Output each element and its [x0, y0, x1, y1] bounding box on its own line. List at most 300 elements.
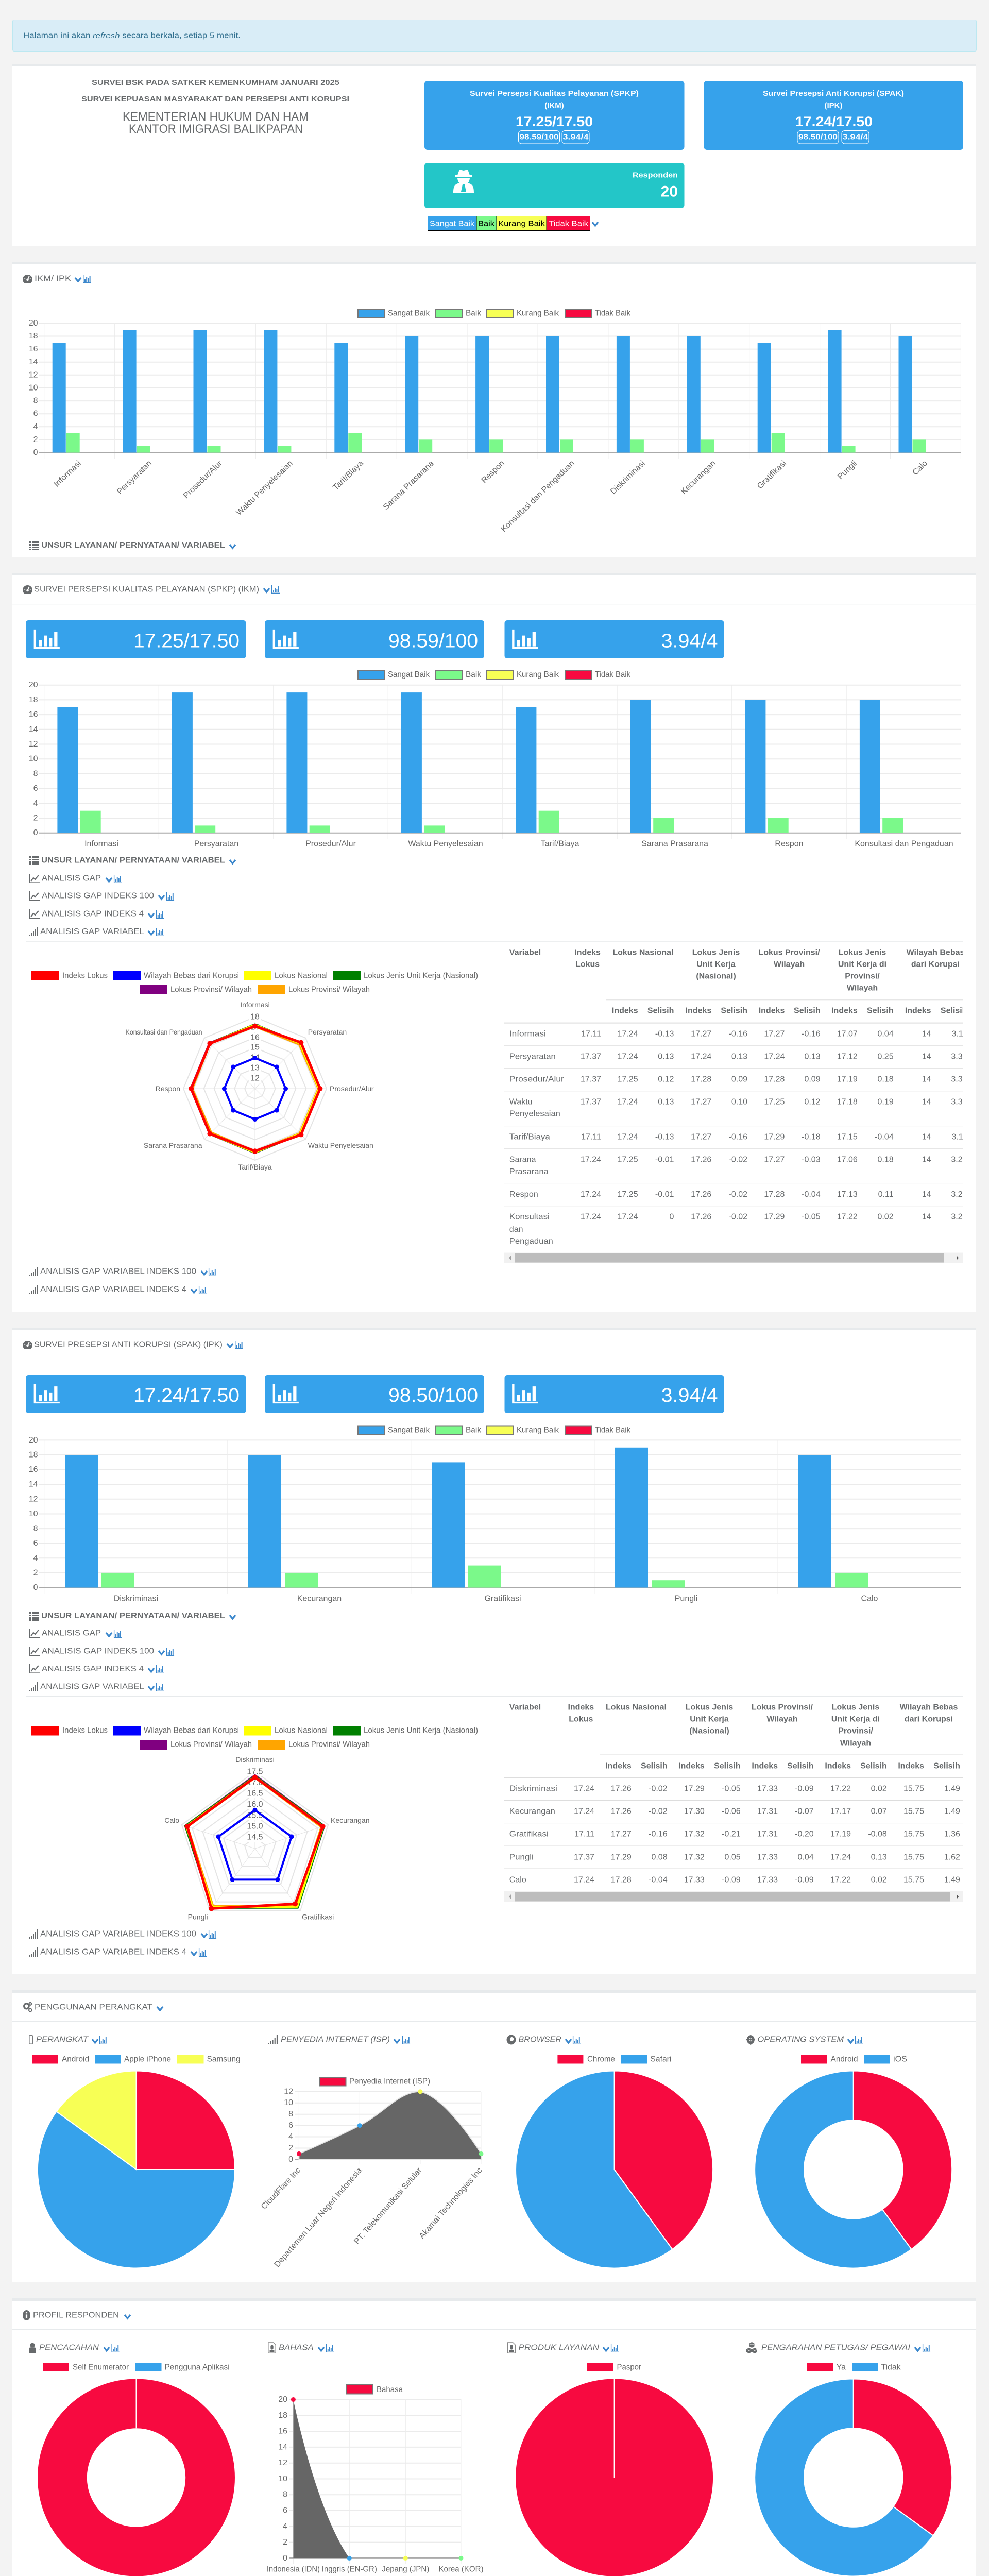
row: Konsultasi dan Pengaduan: 14: [922, 1213, 931, 1221]
bar chart: SPKP elements: Konsultasi dan Pengaduan: [855, 840, 953, 848]
bar chart: all elements: 18: [29, 332, 38, 341]
radar chart: SPKP: 14: [250, 1053, 260, 1062]
heading: analisis gap: [29, 1629, 122, 1638]
row: Persyaratan: 17.37: [581, 1052, 601, 1061]
row: Tarif/Biaya: 14: [922, 1132, 931, 1142]
legend: pencacahan: [43, 2363, 230, 2372]
row: Persyaratan: 17.24: [618, 1052, 638, 1061]
table: analisis gap SPAK: Indeks: [568, 1703, 594, 1711]
bar chart: SPAK elements: Calo: [861, 1594, 878, 1603]
bar chart: SPKP elements: Tarif/Biaya: [541, 840, 579, 848]
radar legend: Wilayah Bebas dari Korupsi: [144, 972, 239, 980]
area chart: ISP: CloudFlare Inc: [260, 2166, 302, 2211]
area chart: ISP: 2: [288, 2144, 293, 2153]
table: analisis gap SPAK: Selisih: [860, 1762, 887, 1770]
row: Calo: 17.33: [684, 1875, 705, 1885]
bar chart: SPKP elements: 20: [29, 681, 38, 689]
card: SPAK score: Survei Presepsi Anti Korupsi (SPAK): [763, 89, 904, 98]
table: analisis gap SPKP: Indeks: [612, 1007, 638, 1015]
row: Gratifikasi: 17.11: [574, 1830, 594, 1838]
table: analisis gap SPAK: Unit Kerja di: [831, 1715, 880, 1724]
row: Gratifikasi: 17.32: [684, 1830, 705, 1838]
radar chart: SPKP: Informasi: [240, 1001, 270, 1009]
row: Sarana Prasarana: 0.18: [877, 1155, 894, 1164]
row: Informasi: 17.27: [764, 1029, 785, 1039]
radar chart: SPAK: 16.5: [247, 1789, 263, 1798]
radar chart: SPAK: 14.5: [247, 1833, 263, 1841]
radar legend: Lokus Nasional: [275, 1726, 328, 1735]
row: Respon: 17.24: [581, 1190, 601, 1199]
row: Gratifikasi: [509, 1830, 960, 1838]
row: Pungli: 1.62: [944, 1853, 960, 1862]
card: SPAK score: (IPK): [824, 101, 843, 110]
heading: perangkat: PERANGKAT: [36, 2035, 89, 2044]
row: Prosedur/Alur: 17.25: [618, 1075, 638, 1084]
card: SPKP score: (IKM): [544, 101, 564, 110]
table: analisis gap SPKP: Lokus Jenis: [692, 948, 740, 957]
bar chart: all elements: 6: [33, 410, 38, 418]
stat card: indeks 17.5: 17.25/17.50: [133, 631, 240, 652]
row: Respon: Respon: [509, 1190, 538, 1199]
legend: operating system: iOS: [893, 2055, 907, 2064]
row: Sarana Prasarana: 17.24: [581, 1155, 601, 1164]
area chart: bahasa: Inggris (EN-GR): [322, 2565, 377, 2574]
heading: analisis gap indeks 100: ANALISIS GAP INDEKS 100: [42, 1647, 154, 1656]
table: analisis gap SPAK: Lokus Provinsi/: [752, 1703, 813, 1711]
bar chart: SPKP elements: 8: [33, 769, 38, 778]
legend: perangkat: Samsung: [207, 2055, 241, 2064]
legend: rating scale: Sangat Baik: [430, 219, 475, 228]
heading: IKM/ IPK: [23, 274, 91, 283]
radar chart: SPAK: Diskriminasi: [235, 1755, 275, 1764]
area chart: bahasa: 4: [283, 2522, 287, 2531]
heading: analisis gap indeks 4: [29, 1664, 164, 1673]
heading: operating system: [746, 2035, 863, 2045]
row: Waktu Penyelesaian: 0.10: [731, 1097, 747, 1107]
table: analisis gap SPKP: Unit Kerja: [696, 960, 736, 969]
stat card: indeks 100: [265, 620, 484, 658]
bar chart: SPKP elements: 6: [33, 784, 38, 793]
row: Kecurangan: 17.31: [757, 1807, 778, 1816]
row: Sarana Prasarana: 17.06: [837, 1155, 858, 1164]
chart legend: [358, 309, 631, 317]
bar chart: SPKP elements: 12: [29, 740, 38, 749]
bar chart: SPKP elements: 14: [29, 725, 38, 734]
table: analisis gap SPAK: Provinsi/: [838, 1727, 873, 1735]
panel: survey summary: [12, 64, 976, 246]
row: Persyaratan: 0.13: [658, 1052, 674, 1061]
bar chart: SPAK elements: [29, 1436, 961, 1603]
row: Kecurangan: [509, 1807, 960, 1816]
radar chart: SPKP: 13: [250, 1063, 260, 1073]
legend: browser: Chrome: [587, 2055, 615, 2064]
table: analisis gap SPKP: Selisih: [721, 1007, 747, 1015]
table: analisis gap SPKP: Indeks: [905, 1007, 931, 1015]
table: analisis gap SPKP: Lokus Provinsi/: [758, 948, 820, 957]
chart legend: Kurang Baik: [517, 1426, 559, 1434]
card: SPAK score: 17.24/17.50: [795, 114, 873, 129]
table: analisis gap SPKP: Lokus Nasional: [612, 948, 673, 957]
bar chart: all elements: 16: [29, 345, 38, 353]
row: Konsultasi dan Pengaduan: dan: [509, 1225, 523, 1234]
bar chart: all elements: Kecurangan: [679, 459, 718, 496]
card: SPKP score: 98.59/100: [519, 133, 558, 141]
row: Kecurangan: 17.17: [830, 1807, 851, 1816]
row: Informasi: 0.04: [877, 1029, 894, 1039]
row: Konsultasi dan Pengaduan: -0.05: [802, 1213, 821, 1221]
heading: penggunaan perangkat: PENGGUNAAN PERANGKAT: [35, 2003, 152, 2011]
bar chart: SPAK elements: 12: [29, 1495, 38, 1503]
row: Kecurangan: 17.24: [574, 1807, 594, 1816]
row: Diskriminasi: 17.26: [611, 1785, 632, 1793]
heading: pengarahan petugas: [746, 2342, 930, 2353]
table: analisis gap SPKP: Lokus: [575, 960, 600, 969]
area chart: ISP: 0: [288, 2155, 293, 2164]
row: Pungli: 17.33: [757, 1853, 778, 1862]
heading: analisis gap indeks 4: ANALISIS GAP INDEKS 4: [42, 910, 144, 918]
row: Diskriminasi: 15.75: [903, 1785, 924, 1793]
heading: analisis gap indeks 100: ANALISIS GAP INDEKS 100: [42, 891, 154, 901]
row: Persyaratan: 14: [922, 1052, 931, 1061]
row: Waktu Penyelesaian: 0.19: [877, 1097, 894, 1107]
row: Konsultasi dan Pengaduan: [509, 1213, 967, 1246]
radar chart: SPAK: Gratifikasi: [302, 1913, 334, 1921]
chart legend: Baik: [466, 670, 482, 679]
row: Calo: -0.04: [649, 1875, 668, 1885]
radar legend: Lokus Provinsi/ Wilayah: [288, 1740, 370, 1749]
bar chart: all elements: Diskriminasi: [609, 459, 647, 496]
panel: penggunaan perangkat: [12, 1990, 976, 2282]
heading: gap variabel indeks 4: ANALISIS GAP VARIABEL INDEKS 4: [40, 1947, 186, 1957]
row: Waktu Penyelesaian: 17.18: [837, 1097, 858, 1107]
row: Diskriminasi: -0.02: [649, 1785, 668, 1793]
bar chart: all elements: 4: [33, 422, 38, 431]
heading: gap variabel indeks 100: ANALISIS GAP VARIABEL INDEKS 100: [40, 1930, 196, 1938]
radar legend: Lokus Jenis Unit Kerja (Nasional): [364, 1726, 478, 1735]
heading: penyedia internet: PENYEDIA INTERNET (ISP): [281, 2035, 390, 2044]
row: Informasi: 17.27: [691, 1029, 711, 1039]
row: Waktu Penyelesaian: 3.37: [951, 1097, 967, 1107]
row: Persyaratan: 17.12: [837, 1052, 858, 1061]
chart legend: Sangat Baik: [388, 670, 430, 679]
bar chart: SPAK elements: 6: [33, 1539, 38, 1548]
row: Diskriminasi: 17.24: [574, 1785, 594, 1793]
legend: perangkat: Android: [62, 2055, 89, 2064]
radar legend: Lokus Nasional: [275, 972, 328, 980]
bar chart: SPAK elements: 16: [29, 1465, 38, 1474]
bar chart: all elements: 12: [29, 370, 38, 379]
row: Diskriminasi: 17.22: [830, 1785, 851, 1793]
table: analisis gap SPKP: Unit Kerja di: [838, 960, 886, 969]
row: Respon: 0.11: [878, 1190, 894, 1199]
table: analisis gap SPKP: Wilayah Bebas: [907, 948, 964, 957]
table: analisis gap SPKP: (Nasional): [696, 972, 736, 981]
chart legend: Tidak Baik: [595, 309, 631, 317]
row: Calo: 0.02: [871, 1875, 887, 1885]
pie chart: perangkat: [38, 2071, 235, 2268]
scrollbar: [504, 1253, 963, 1263]
table: analisis gap SPAK: Lokus: [569, 1715, 593, 1724]
row: Waktu Penyelesaian: 17.24: [618, 1097, 638, 1107]
radar chart: SPKP: Respon: [156, 1084, 180, 1093]
legend: pengarahan: Tidak: [881, 2363, 901, 2372]
table: analisis gap SPAK: Indeks: [825, 1762, 851, 1770]
row: Persyaratan: [510, 1053, 963, 1061]
chart legend: Baik: [466, 1426, 482, 1434]
table: analisis gap SPKP: Indeks: [831, 1007, 858, 1015]
bar chart: all elements: 2: [33, 435, 38, 444]
area chart: bahasa: 0: [283, 2554, 287, 2563]
radar chart: SPKP: Persyaratan: [308, 1028, 347, 1036]
card: respondents: Responden: [633, 171, 678, 179]
table: analisis gap SPKP: Selisih: [647, 1007, 674, 1015]
row: Waktu Penyelesaian: 17.27: [691, 1097, 711, 1107]
radar chart: SPAK: [164, 1755, 370, 1921]
area chart: bahasa: 14: [278, 2443, 287, 2451]
row: Gratifikasi: -0.21: [722, 1830, 741, 1838]
table: analisis gap SPAK: Indeks: [898, 1762, 924, 1770]
row: Kecurangan: 15.75: [903, 1807, 924, 1816]
row: Pungli: 0.04: [798, 1853, 814, 1862]
row: Prosedur/Alur: 0.09: [804, 1075, 821, 1084]
row: Kecurangan: Kecurangan: [509, 1807, 555, 1816]
row: Pungli: 17.32: [684, 1853, 705, 1862]
table: analisis gap SPAK: Wilayah Bebas: [900, 1703, 958, 1711]
bar chart: SPKP elements: 18: [29, 696, 38, 704]
heading: bahasa: BAHASA: [279, 2343, 314, 2352]
bar chart: SPAK elements: Pungli: [675, 1594, 697, 1603]
row: Informasi: 17.11: [581, 1029, 601, 1039]
radar legend: [31, 971, 478, 994]
row: Konsultasi dan Pengaduan: 17.26: [691, 1213, 711, 1221]
table: analisis gap SPAK: Selisih: [714, 1762, 741, 1770]
card: SPKP score: [424, 81, 684, 150]
icon: chevron: [592, 222, 598, 226]
row: Waktu Penyelesaian: 14: [922, 1097, 931, 1107]
row: Gratifikasi: Gratifikasi: [509, 1830, 549, 1838]
row: Konsultasi dan Pengaduan: 0: [669, 1213, 674, 1221]
row: Waktu Penyelesaian: Penyelesaian: [509, 1110, 560, 1118]
bar chart: SPKP elements: 2: [33, 814, 38, 822]
bar chart: all elements: 10: [29, 383, 38, 393]
pie chart: produk layanan: [516, 2379, 713, 2576]
row: Pungli: [509, 1853, 960, 1862]
stat card: indeks 4: [505, 620, 724, 658]
row: Gratifikasi: -0.20: [795, 1830, 814, 1838]
area chart: ISP: 10: [284, 2098, 293, 2107]
bar chart: SPKP elements: 10: [29, 755, 38, 764]
row: Kecurangan: 0.07: [871, 1807, 887, 1816]
pie chart: browser: [516, 2071, 713, 2268]
bar chart: SPAK elements: Kecurangan: [297, 1594, 342, 1603]
row: Persyaratan: 3.37: [951, 1052, 967, 1061]
chart legend: Baik: [466, 309, 482, 317]
row: Pungli: 0.13: [871, 1853, 887, 1862]
bar chart: SPAK elements: Gratifikasi: [484, 1594, 521, 1603]
row: Gratifikasi: -0.08: [868, 1830, 887, 1838]
icon: user secret: [453, 170, 474, 193]
heading: produk layanan: [507, 2343, 619, 2353]
donut chart: pencacahan: [62, 2379, 210, 2552]
card: SPKP score: Survei Persepsi Kualitas Pelayanan (SPKP): [470, 89, 639, 98]
bar chart: SPKP elements: 16: [29, 710, 38, 719]
row: Pungli: 17.37: [574, 1853, 594, 1862]
row: Sarana Prasarana: Prasarana: [509, 1167, 549, 1176]
radar chart: SPKP: Waktu Penyelesaian: [308, 1141, 373, 1149]
row: Waktu Penyelesaian: [509, 1097, 967, 1118]
bar chart: all elements: 0: [33, 448, 38, 457]
table: analisis gap SPAK: Lokus Nasional: [606, 1703, 667, 1711]
heading: IKM/ IPK: IKM/ IPK: [35, 274, 71, 283]
row: Persyaratan: 0.13: [804, 1052, 821, 1061]
table: analisis gap SPAK: Selisih: [787, 1762, 814, 1770]
radar chart: SPAK: 17.5: [247, 1767, 263, 1776]
row: Respon: 14: [922, 1190, 931, 1199]
area chart: ISP: Departemen Luar Negeri Indonesia: [273, 2166, 364, 2269]
chart legend: [358, 1426, 631, 1435]
row: Tarif/Biaya: Tarif/Biaya: [509, 1132, 550, 1142]
bar chart: SPAK elements: 2: [33, 1568, 38, 1577]
legend: pencacahan: Self Enumerator: [73, 2363, 129, 2372]
table: analisis gap SPKP: Wilayah: [774, 960, 805, 969]
heading: unsur layanan: UNSUR LAYANAN/ PERNYATAAN/ VARIABEL: [41, 1612, 225, 1620]
row: Respon: [510, 1191, 963, 1198]
row: Sarana Prasarana: 17.27: [764, 1155, 785, 1164]
row: Diskriminasi: 17.33: [757, 1785, 778, 1793]
row: Informasi: -0.16: [802, 1029, 821, 1039]
legend: operating system: [801, 2055, 907, 2064]
bar chart: SPAK elements: 10: [29, 1510, 38, 1518]
row: Prosedur/Alur: 3.37: [951, 1075, 967, 1084]
stat card: indeks 17.5: 17.24/17.50: [133, 1385, 240, 1406]
row: Sarana Prasarana: 14: [922, 1155, 931, 1164]
table: analisis gap SPKP: Indeks: [686, 1007, 711, 1015]
radar legend: [31, 1726, 478, 1750]
heading: survey title: KANTOR IMIGRASI BALIKPAPAN: [129, 122, 303, 136]
radar legend: Wilayah Bebas dari Korupsi: [144, 1726, 239, 1735]
row: Waktu Penyelesaian: Waktu: [509, 1097, 533, 1107]
row: Informasi: 17.07: [837, 1029, 858, 1039]
heading: analisis gap variabel: [29, 1682, 164, 1691]
row: Respon: -0.02: [729, 1190, 747, 1199]
row: Respon: 17.13: [837, 1190, 858, 1199]
row: Respon: 17.26: [691, 1190, 711, 1199]
stat card: indeks 17.5: [26, 620, 246, 658]
row: Pungli: Pungli: [509, 1853, 534, 1862]
row: Prosedur/Alur: 0.18: [877, 1075, 894, 1084]
table: analisis gap SPKP: Wilayah: [847, 984, 878, 992]
row: Konsultasi dan Pengaduan: 17.29: [764, 1213, 785, 1221]
area chart: bahasa: 12: [278, 2459, 287, 2467]
table: analisis gap SPAK: dari Korupsi: [905, 1715, 953, 1724]
area chart: ISP: 8: [288, 2110, 293, 2119]
legend: rating scale: Tidak Baik: [549, 219, 589, 228]
table: analisis gap SPAK: Lokus Jenis: [686, 1703, 733, 1711]
row: Pungli: 17.24: [830, 1853, 851, 1862]
heading: analisis gap variabel: ANALISIS GAP VARIABEL: [40, 1683, 144, 1691]
radar chart: SPAK: 17.0: [247, 1778, 263, 1787]
table: analisis gap SPAK: (Nasional): [689, 1727, 729, 1735]
bar chart: SPKP elements: 0: [33, 828, 38, 837]
table: analisis gap SPKP: [504, 948, 968, 1246]
row: Tarif/Biaya: -0.18: [802, 1132, 821, 1142]
radar chart: SPKP: 12: [250, 1074, 260, 1083]
radar chart: SPKP: Prosedur/Alur: [330, 1084, 374, 1093]
bar chart: SPKP elements: Respon: [775, 840, 804, 848]
row: Calo: [509, 1875, 960, 1885]
stat card: indeks 17.5: [26, 1375, 246, 1413]
chart legend: Sangat Baik: [388, 309, 430, 317]
heading: profil responden: [23, 2310, 130, 2320]
bar chart: SPKP elements: Prosedur/Alur: [305, 840, 356, 848]
radar legend: Lokus Provinsi/ Wilayah: [170, 1740, 252, 1749]
bar chart: SPAK elements: 0: [33, 1583, 38, 1592]
bar chart: SPKP elements: Waktu Penyelesaian: [408, 840, 483, 848]
legend: perangkat: Apple iPhone: [124, 2055, 171, 2064]
bar chart: all elements: [29, 319, 961, 534]
heading: perangkat: [29, 2035, 107, 2044]
legend: pengarahan: [807, 2363, 901, 2372]
heading: browser: BROWSER: [518, 2035, 561, 2044]
heading: analisis gap variabel: [29, 927, 164, 936]
row: Prosedur/Alur: 0.09: [731, 1075, 747, 1084]
row: Tarif/Biaya: -0.16: [729, 1132, 747, 1142]
radar chart: SPKP: Konsultasi dan Pengaduan: [126, 1028, 202, 1036]
row: Prosedur/Alur: 17.28: [764, 1075, 785, 1084]
area chart: bahasa: 6: [283, 2506, 287, 2515]
bar chart: SPKP elements: Persyaratan: [194, 840, 238, 848]
row: Sarana Prasarana: 17.25: [618, 1155, 638, 1164]
heading: pencacahan: PENCACAHAN: [39, 2343, 99, 2352]
donut chart: pengarahan: [755, 2379, 952, 2576]
row: Sarana Prasarana: 3.24: [951, 1155, 967, 1164]
row: Gratifikasi: 1.36: [944, 1830, 960, 1838]
legend: rating scale: Kurang Baik: [498, 219, 545, 228]
row: Informasi: [510, 1030, 963, 1037]
row: Sarana Prasarana: [510, 1156, 963, 1174]
row: Prosedur/Alur: 17.19: [837, 1075, 858, 1084]
row: Pungli: 0.08: [651, 1853, 668, 1862]
area chart: bahasa: 16: [278, 2427, 287, 2436]
bar chart: all elements: Sarana Prasarana: [382, 459, 436, 512]
row: Konsultasi dan Pengaduan: 3.24: [951, 1213, 967, 1221]
panel: SPAK (IPK): [12, 1328, 976, 1974]
row: Informasi: 3.11: [952, 1029, 967, 1039]
legend: browser: Safari: [650, 2055, 671, 2064]
radar legend: Indeks Lokus: [62, 972, 108, 980]
stat card: indeks 100: 98.59/100: [388, 631, 478, 652]
bar chart: SPAK elements: 18: [29, 1451, 38, 1459]
card: respondents: [424, 163, 684, 208]
row: Kecurangan: 17.30: [684, 1807, 705, 1816]
row: Tarif/Biaya: 17.24: [618, 1132, 638, 1142]
row: Waktu Penyelesaian: 0.13: [658, 1097, 674, 1107]
heading: survey title: SURVEI BSK PADA SATKER KEMENKUMHAM JANUARI 2025: [92, 78, 339, 87]
bar chart: SPKP elements: [29, 681, 961, 848]
bar chart: SPKP elements: Informasi: [84, 840, 118, 848]
heading: SPAK: SURVEI PRESEPSI ANTI KORUPSI (SPAK) (IPK): [34, 1341, 223, 1349]
radar chart: SPAK: Kecurangan: [331, 1816, 370, 1824]
heading: survey title: KEMENTERIAN HUKUM DAN HAM: [123, 110, 309, 124]
row: Waktu Penyelesaian: 0.12: [804, 1097, 821, 1107]
legend: rating scale: Baik: [478, 219, 495, 228]
heading: unsur layanan: UNSUR LAYANAN/ PERNYATAAN/ VARIABEL: [41, 856, 225, 865]
row: Gratifikasi: 17.27: [611, 1830, 632, 1838]
chart legend: [358, 670, 631, 679]
row: Calo: 17.28: [611, 1875, 632, 1885]
legend: pencacahan: Pengguna Aplikasi: [165, 2363, 230, 2372]
area chart: bahasa: 2: [283, 2538, 287, 2547]
